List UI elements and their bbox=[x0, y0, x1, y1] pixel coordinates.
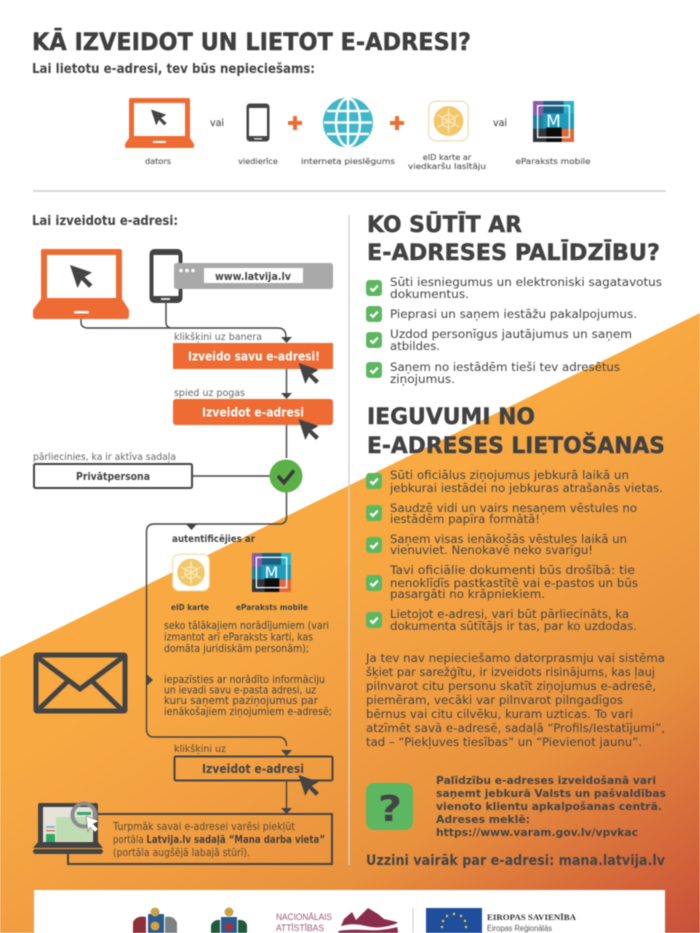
item 2 bbox=[366, 306, 637, 322]
icon: plus bbox=[288, 116, 302, 130]
text: follow instructions bbox=[164, 621, 329, 655]
paragraph: authorising another person bbox=[365, 652, 665, 749]
logo: coat of arms small bbox=[211, 908, 247, 933]
benefit 5 bbox=[366, 608, 637, 633]
benefit 4: Tavi oficiālie dokumenti būs drošībā: tie bbox=[389, 564, 635, 577]
paragraph: authorising another person: pilnvarot citu personu skatīt ziņojumus e-adresē, bbox=[366, 680, 656, 693]
item 3 bbox=[366, 328, 632, 353]
heading: what to send: E-ADRESES PALĪDZĪBU? bbox=[367, 238, 660, 266]
item 4: ziņojumus. bbox=[390, 373, 455, 386]
logo text: European Union: EIROPAS SAVIENĪBA bbox=[487, 912, 577, 922]
benefit 1: Sūti oficiālus ziņojumus jebkurā laikā un bbox=[390, 469, 629, 482]
benefit 2 bbox=[366, 502, 637, 526]
icon: eParaksts mobile: M bbox=[265, 563, 278, 582]
step: create outline button: Izveidot e-adresi bbox=[202, 762, 304, 776]
help text: vienoto klientu apkalpošanas centrā. bbox=[436, 800, 662, 813]
icon: eID card bbox=[429, 101, 468, 141]
icon: eParaksts mobile: M bbox=[546, 112, 561, 132]
benefit 1 bbox=[366, 469, 663, 495]
benefit 4: pasargāti no krāpniekiem. bbox=[390, 588, 545, 601]
paragraph: authorising another person: tad – “Piekļuves tiesības” un “Pievienot jaunu”. bbox=[366, 736, 642, 749]
help text: saņemt jebkurā Valsts un pašvaldības bbox=[436, 787, 666, 800]
footer logos panel bbox=[34, 890, 665, 933]
final note box: (portāla augšējā labajā stūrī). bbox=[113, 847, 250, 859]
help text: https://www.varam.gov.lv/vpvkac bbox=[436, 826, 638, 839]
icon: laptop with portal screen bbox=[33, 803, 103, 854]
help text bbox=[436, 774, 666, 839]
step: banner label: klikšķini uz banera bbox=[174, 331, 262, 343]
labels under requirement icons: eID karte ar bbox=[423, 152, 472, 162]
paragraph: authorising another person: bērnus vai citu cilvēku, kuram uzticas. To vari bbox=[366, 708, 633, 721]
item 1: dokumentus. bbox=[390, 288, 469, 301]
step: button label: spied uz pogas bbox=[174, 388, 245, 399]
icon: cursor bbox=[298, 775, 319, 796]
requirements row bbox=[125, 98, 590, 171]
arrow bbox=[281, 808, 292, 814]
labels under requirement icons: viedkaršu lasītāju bbox=[408, 161, 486, 171]
step: private person box: Privātpersona bbox=[76, 470, 150, 483]
icon: green check circle bbox=[270, 460, 302, 492]
final note box: Turpmāk savai e-adresei varēsi piekļūt bbox=[112, 822, 295, 833]
labels under requirement icons: interneta pieslēgums bbox=[301, 156, 395, 166]
labels: auth methods bbox=[171, 603, 309, 612]
label: vai: vai bbox=[493, 118, 507, 129]
item 2: Pieprasi un saņem iestāžu pakalpojumus. bbox=[390, 308, 637, 321]
benefit 4 bbox=[366, 564, 638, 601]
item 1 bbox=[366, 276, 662, 301]
step: private person box bbox=[34, 464, 192, 488]
logo text: European Union: Eiropas Reģionālās bbox=[487, 924, 552, 933]
title: KĀ IZVEIDOT UN LIETOT E-ADRESI? bbox=[32, 27, 471, 56]
text: enter e-mail: ienākošajiem ziņojumiem e-adresē; bbox=[164, 706, 332, 718]
paragraph: authorising another person: piemēram, vecāki var pilnvarot pilngadīgos bbox=[366, 694, 623, 707]
benefit 1: jebkurai iestādei no jebkuras atrašanās vietas. bbox=[389, 482, 663, 495]
help text: Adreses meklē: bbox=[436, 813, 530, 826]
item 3: Uzdod personīgus jautājumus un saņem bbox=[390, 328, 632, 341]
item 3: atbildes. bbox=[390, 340, 440, 353]
step: private person label: pārliecinies, ka ir aktīva sadaļa bbox=[33, 452, 176, 463]
final note box bbox=[68, 814, 332, 864]
heading: benefits: IEGUVUMI NO bbox=[367, 404, 535, 430]
logo: EU flag bbox=[426, 908, 482, 933]
left column: how to create bbox=[32, 214, 333, 864]
step: create outline button bbox=[174, 756, 332, 780]
benefit 5: dokumenta sūtītājs ir tas, par ko uzdodas. bbox=[390, 620, 637, 633]
help text: Palīdzību e-adreses izveidošanā vari bbox=[436, 774, 656, 787]
text: enter e-mail: kuru saņemt paziņojumus par bbox=[164, 696, 319, 707]
paragraph: authorising another person: atzīmēt savā e-adresē, sadaļā “Profils/Iestatījumi”, bbox=[366, 722, 665, 735]
heading: Lai izveidotu e-adresi: bbox=[32, 214, 178, 229]
heading: what to send: KO SŪTĪT AR bbox=[367, 210, 522, 238]
arrow bbox=[281, 750, 292, 756]
logo text: national development plan: NACIONĀLAIS bbox=[276, 912, 332, 922]
icon: laptop large bbox=[33, 249, 129, 319]
step: create button: Izveidot e-adresi bbox=[202, 406, 304, 420]
text: follow instructions: seko tālākajiem norādījumiem (vari bbox=[164, 621, 329, 632]
labels under requirement icons: eParaksts mobile bbox=[516, 156, 590, 166]
step: click label: klikšķini uz bbox=[174, 743, 226, 755]
list: what to send bbox=[366, 276, 662, 386]
item 4: Saņem no iestādēm tieši tev adresētus bbox=[390, 361, 620, 374]
step: banner button: Izveido savu e-adresi! bbox=[188, 350, 320, 364]
logo text: national development plan bbox=[276, 912, 332, 933]
icon: help question mark bbox=[366, 783, 413, 830]
item 1: Sūti iesniegumus un elektroniski sagatavotus bbox=[390, 276, 662, 289]
labels: auth methods: eParaksts mobile bbox=[236, 603, 309, 612]
icon: eID card bbox=[173, 554, 209, 591]
list: benefits bbox=[366, 469, 663, 633]
heading: benefits: E-ADRESES LIETOŠANAS bbox=[367, 431, 665, 459]
step: create button bbox=[173, 399, 333, 425]
arrow bbox=[281, 337, 292, 343]
icon: phone and browser bar bbox=[150, 249, 333, 303]
benefit 4: nenoklīdīs pastkastītē vai e-pastos un būs bbox=[390, 577, 638, 590]
paragraph: authorising another person: šķiet par sarežģītu, ir izveidots risinājums, kas ļauj bbox=[366, 666, 655, 679]
arrow bbox=[186, 524, 197, 530]
logo: Latvia map bbox=[338, 908, 398, 933]
item 4 bbox=[366, 361, 620, 386]
icon: envelope bbox=[36, 655, 125, 711]
connector lines top bbox=[81, 303, 286, 337]
paragraph: authorising another person: Ja tev nav nepieciešamo datorprasmju vai sistēma bbox=[365, 652, 665, 665]
icon: help question mark: ? bbox=[378, 789, 402, 830]
subtitle: Lai lietotu e-adresi, tev būs nepieciešams: bbox=[32, 62, 315, 77]
orange diagonal background bbox=[0, 313, 700, 933]
final note box: portāla Latvija.lv sadaļā “Mana darba vieta” bbox=[113, 835, 325, 846]
step: authenticate: autentificējies ar bbox=[172, 534, 255, 545]
icon: laptop bbox=[125, 98, 194, 148]
text: follow instructions: domāta juridiskām personām); bbox=[164, 644, 309, 655]
arrow bbox=[281, 393, 292, 399]
labels under requirement icons: viedierīce bbox=[238, 156, 278, 166]
text: enter e-mail: iepazīsties ar norādīto informāciju bbox=[164, 675, 325, 686]
text: enter e-mail: un ievadi savu e-pasta adresi, uz bbox=[164, 686, 316, 696]
benefit 3: Saņem visas ienākošās vēstules laikā un bbox=[390, 533, 627, 546]
logo text: European Union bbox=[487, 912, 577, 933]
text: follow instructions: izmantot arī eParaksts karti, kas bbox=[164, 632, 313, 644]
labels: auth methods: eID karte bbox=[171, 603, 210, 612]
logo: coat of arms large bbox=[133, 908, 177, 933]
label: vai: vai bbox=[210, 118, 224, 129]
icon: plus bbox=[390, 116, 404, 130]
icon: cursor bbox=[298, 363, 319, 384]
benefit 2: Saudzē vidi un vairs nesaņem vēstules no bbox=[390, 502, 637, 515]
icon: cursor bbox=[298, 419, 319, 440]
icon: eParaksts mobile bbox=[533, 101, 574, 142]
heading: benefits bbox=[367, 404, 665, 459]
icon: eParaksts mobile bbox=[252, 553, 291, 592]
labels under requirement icons: dators bbox=[145, 156, 171, 166]
heading: what to send bbox=[367, 210, 660, 266]
icon: globe bbox=[323, 98, 373, 148]
benefit 3 bbox=[366, 533, 627, 557]
icon: smartphone bbox=[246, 104, 270, 142]
icon: phone and browser bar: www.latvija.lv bbox=[215, 270, 292, 283]
arrow bbox=[146, 674, 153, 686]
text: enter e-mail bbox=[164, 675, 332, 718]
benefit 2: iestādēm papīra formātā! bbox=[390, 513, 540, 526]
benefit 3: vienuviet. Nenokavē neko svarīgu! bbox=[390, 544, 593, 557]
more info line: Uzzini vairāk par e-adresi: mana.latvija.lv bbox=[366, 853, 665, 869]
labels under requirement icons bbox=[145, 152, 590, 171]
benefit 5: Lietojot e-adresi, vari būt pārliecināts, ka bbox=[390, 608, 629, 621]
logo text: national development plan: ATTĪSTĪBAS bbox=[276, 923, 324, 933]
step: banner button bbox=[173, 343, 333, 369]
